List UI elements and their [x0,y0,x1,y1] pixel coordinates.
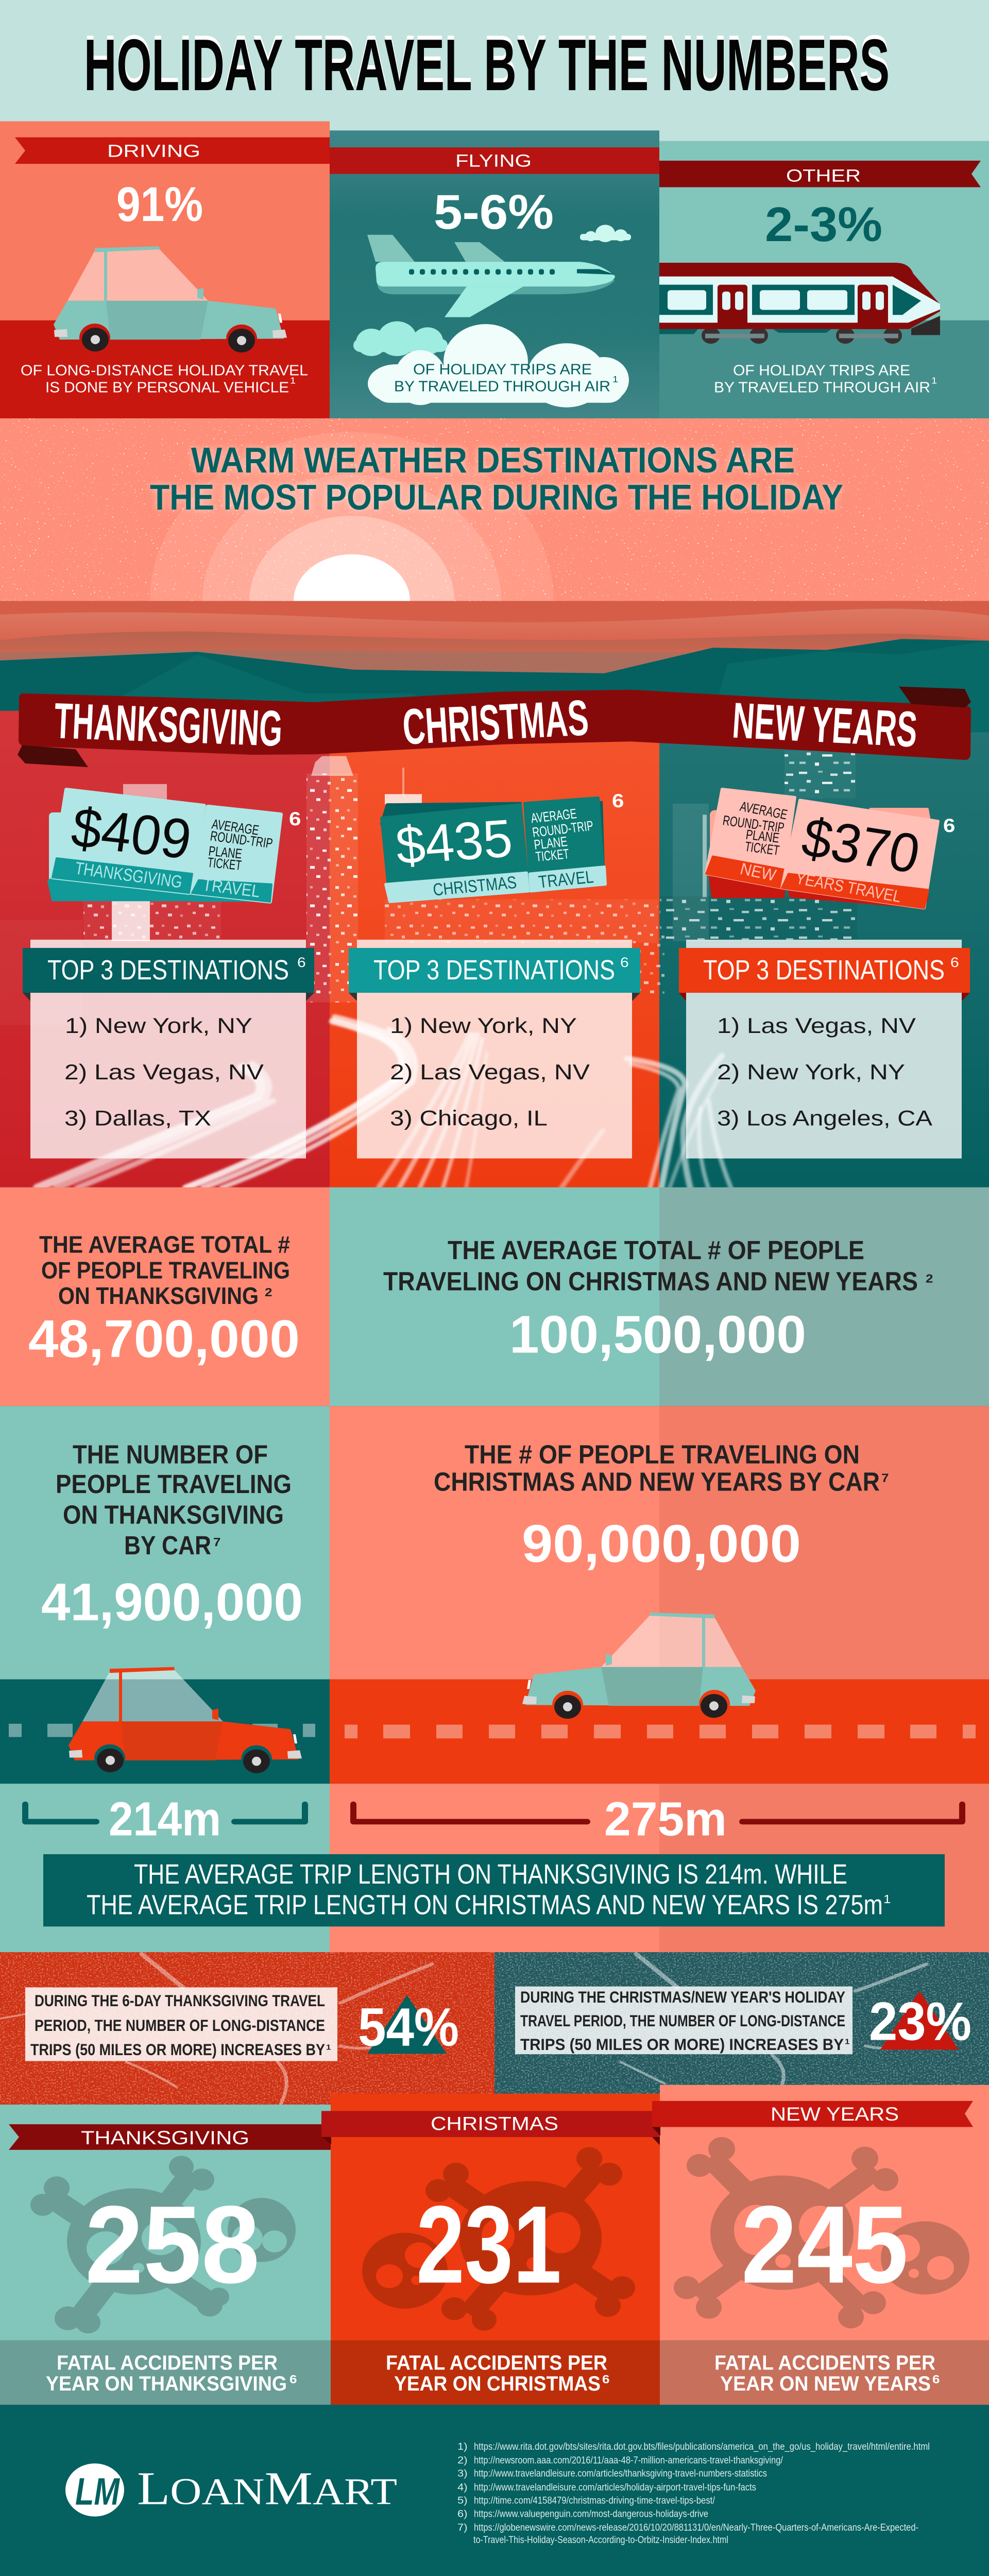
ticket: new years: $370 [797,806,925,885]
heading: warm weather [150,440,843,517]
text box: christmas increase: TRIPS (50 MILES OR MORE) INCREASES BY [520,2036,844,2054]
banner: new years [652,2101,973,2136]
stat: 91%: 91% [116,177,203,232]
footer [0,2405,989,2576]
ticket: christmas: CHRISTMAS [432,872,518,900]
panel: christmas and new years by car: CHRISTMAS AND NEW YEARS BY CAR [434,1467,880,1497]
text box: christmas increase: TRAVEL PERIOD, THE NUMBER OF LONG-DISTANCE [520,2012,845,2030]
banner: driving: DRIVING [107,141,200,161]
panel: thanksgiving fatal accidents [0,2105,331,2405]
text: fatal accidents on thanksgiving: YEAR ON THANKSGIVING [46,2372,287,2396]
text box: christmas increase [515,1987,852,2054]
banner: other: OTHER [786,166,861,185]
panel: christmas and new years by car: 7 [881,1472,889,1485]
icon: teal car [522,1613,756,1719]
text: fatal accidents on new years: 6 [932,2373,940,2386]
heading: warm weather: THE MOST POPULAR DURING THE HOLIDAY [150,477,843,517]
text: driving description: OF LONG-DISTANCE HOLIDAY TRAVEL [21,363,308,379]
banner: other [659,161,981,187]
panel: thanksgiving by car: THE NUMBER OF [73,1440,268,1469]
text: driving description: 1 [290,376,296,386]
stat: 23%: 23% [869,1991,971,2052]
panel: thanksgiving destinations: 3) Dallas, TX [64,1107,211,1130]
panel: total people on christmas and new years: THE AVERAGE TOTAL # OF PEOPLE [448,1236,864,1265]
road: left [0,1680,330,1784]
ticket: thanksgiving: AVERAGE [211,817,260,838]
callout: average trip length: 1 [883,1893,891,1906]
stat: 5-6%: 5-6% [434,185,554,240]
header background [0,0,989,146]
panel: thanksgiving destinations: 1) New York, NY [65,1014,252,1038]
references: http://time.com/4158479/christmas-driving-time-travel-tips-best/ [474,2495,715,2506]
bracket: 214m [25,1792,305,1845]
banner: flying [330,147,668,181]
references: 2) [457,2455,468,2466]
references: 3) [457,2468,468,2479]
panel: destinations background [0,711,989,1188]
ticket: new years: 6 [943,815,955,837]
references: https://www.valuepenguin.com/most-dangerous-holidays-drive [474,2508,708,2519]
ticket: new years: YEARS TRAVEL [794,869,903,906]
icon: skull [30,2156,296,2333]
text box: thanksgiving increase: 1 [326,2043,331,2052]
icon: car [54,246,287,353]
panel: trip length [0,1784,989,1953]
text: fatal accidents on thanksgiving: 6 [289,2373,297,2386]
text box: christmas increase: DURING THE CHRISTMAS/NEW YEAR'S HOLIDAY [520,1989,845,2006]
ticket: christmas: $435 [394,809,515,876]
text: other description: 1 [931,376,937,386]
icon: skull [674,2137,969,2328]
panel: thanksgiving by car [0,1406,330,1680]
ticket: christmas: 6 [612,790,624,812]
text: driving description [21,363,308,396]
text: flying description: BY TRAVELED THROUGH AIR [394,379,610,395]
references: 4) [457,2482,468,2493]
references [457,2441,930,2546]
text: fatal accidents on thanksgiving [46,2351,297,2396]
stat: 245: 245 [741,2183,908,2307]
text: fatal accidents on christmas: 6 [602,2373,609,2386]
ticket: thanksgiving: 6 [289,808,301,829]
panel: new years destinations: 3) Los Angeles, CA [717,1107,932,1130]
panel: flying [330,130,668,418]
ticket: new years: AVERAGE [738,799,789,823]
banner: flying: FLYING [455,150,532,171]
references: http://newsroom.aaa.com/2016/11/aaa-48-7-million-americans-travel-thanksgiving/ [474,2455,783,2466]
ticket: christmas: TRAVEL [537,867,594,892]
landscape [0,601,989,751]
icon: white cloud [368,324,629,408]
panel: total people on thanksgiving: 2 [265,1286,272,1299]
ticket: christmas: PLANE [533,834,568,853]
icon: skull [362,2147,635,2331]
panel: christmas and new years by car: 90,000,000 [522,1514,801,1573]
text box: thanksgiving increase: DURING THE 6-DAY THANKSGIVING TRAVEL [35,1992,325,2010]
logo: LoanMart: LOANMART [137,2463,397,2514]
text: fatal accidents on new years [714,2351,940,2396]
references: 6) [457,2508,468,2519]
ticket: thanksgiving: $409 [68,796,195,871]
panel: christmas destinations: 3) Chicago, IL [390,1107,548,1130]
text: other description [714,363,937,396]
banner: thanksgiving [9,2124,331,2150]
text: flying description: OF HOLIDAY TRIPS ARE [413,362,592,378]
banner: new years: NEW YEARS [771,2104,899,2125]
text: fatal accidents on new years: FATAL ACCIDENTS PER [714,2351,935,2375]
references: 5) [457,2495,468,2506]
panel: thanksgiving by car: ON THANKSGIVING [63,1500,284,1530]
text box: thanksgiving increase: TRIPS (50 MILES OR MORE) INCREASES BY [30,2041,325,2059]
bracket: 275m [353,1792,962,1845]
text: fatal accidents on thanksgiving: FATAL ACCIDENTS PER [57,2351,278,2375]
panel: thanksgiving by car: 41,900,000 [41,1573,303,1632]
ticket: christmas: TICKET [535,846,570,865]
panel: total people on thanksgiving: OF PEOPLE TRAVELING [41,1257,290,1284]
stat: 231: 231 [416,2183,561,2307]
panel: total people on christmas and new years: 2 [926,1273,933,1285]
ticket: christmas: ROUND-TRIP [532,818,594,840]
heading: christmas: CHRISTMAS [401,690,590,755]
ticket: new years: ROUND-TRIP [722,813,786,836]
city skyline [0,751,857,1025]
panel: new years destinations: 6 [950,955,959,971]
heading: thanksgiving: THANKSGIVING [53,693,284,757]
panel: total people on thanksgiving: ON THANKSGIVING [58,1283,259,1309]
panel: thanksgiving by car: 7 [213,1536,220,1549]
panel: total people on christmas and new years: 100,500,000 [509,1305,806,1364]
callout: average trip length [43,1854,945,1926]
text: fatal accidents on christmas: YEAR ON CHRISTMAS [394,2372,601,2396]
text: fatal accidents on christmas [386,2351,609,2396]
panel: new years destinations: 2) New York, NY [717,1060,905,1084]
stat: 54%: 54% [358,1996,459,2057]
panel: thanksgiving trip increase [0,1952,494,2105]
ticket: new years: TICKET [744,839,780,858]
ribbon [18,687,971,767]
text: flying description: 1 [612,375,618,385]
banner: driving [15,138,337,170]
text: other description: BY TRAVELED THROUGH AIR [714,380,930,396]
road: right [330,1680,989,1784]
text: driving description: IS DONE BY PERSONAL VEHICLE [45,380,289,396]
icon: plane [367,235,615,317]
panel: total people on christmas and new years [330,1188,989,1406]
references: http://www.travelandleisure.com/articles/thanksgiving-travel-numbers-statistics [474,2468,767,2479]
ticket: thanksgiving [49,790,301,902]
icon: red car [69,1667,302,1774]
panel: new years fatal accidents [652,2085,989,2405]
icon: small cloud [580,225,631,242]
panel: thanksgiving destinations: 6 [297,955,306,971]
panel: thanksgiving destinations [23,940,314,1159]
icon: teal cloud [353,321,448,356]
panel: christmas destinations: 2) Las Vegas, NV [390,1060,590,1084]
ticket: thanksgiving: PLANE [208,843,243,862]
panel: total people on thanksgiving: THE AVERAGE TOTAL # [39,1231,290,1258]
ticket: thanksgiving: ROUND-TRIP [209,828,274,852]
panel: christmas and new years by car: THE # OF PEOPLE TRAVELING ON [465,1440,860,1469]
references: http://www.travelandleisure.com/articles/holiday-airport-travel-tips-fun-facts [474,2482,756,2493]
panel: driving [0,121,337,418]
light trails [38,1017,731,1188]
panel: thanksgiving by car: PEOPLE TRAVELING [56,1470,292,1499]
ticket: new years: NEW [738,860,778,885]
stat: 2-3%: 2-3% [765,197,882,252]
text box: thanksgiving increase: PERIOD, THE NUMBER OF LONG-DISTANCE [35,2017,325,2035]
icon: sun with rings [150,432,554,770]
panel: christmas and new years trip increase [494,1952,989,2105]
panel: thanksgiving by car: BY CAR [124,1531,211,1560]
panel: thanksgiving destinations: TOP 3 DESTINATIONS [47,955,289,986]
stat: 258: 258 [85,2183,260,2307]
text: fatal accidents on christmas: FATAL ACCIDENTS PER [386,2351,607,2375]
ticket: thanksgiving: THANKSGIVING [74,858,184,892]
text: other description: OF HOLIDAY TRIPS ARE [733,363,910,379]
text box: christmas increase: 1 [845,2038,850,2046]
banner: christmas: CHRISTMAS [431,2113,558,2134]
banner: thanksgiving: THANKSGIVING [81,2127,249,2149]
panel: total people on thanksgiving [0,1188,330,1406]
references: to-Travel-This-Holiday-Season-According-to-Orbitz-Insider-Index.html [473,2534,728,2546]
panel: total people on thanksgiving: 48,700,000 [28,1310,300,1369]
panel: christmas destinations: 6 [620,955,629,971]
ticket: thanksgiving: TICKET [207,855,242,873]
icon: train [659,263,940,344]
panel: new years destinations: 1) Las Vegas, NV [717,1014,916,1038]
bracket: 275m: 275m [604,1792,727,1845]
ticket: thanksgiving: TRAVEL [201,874,262,901]
logo: LoanMart: LM [75,2470,120,2513]
panel: thanksgiving destinations: 2) Las Vegas, NV [64,1060,264,1084]
panel: christmas destinations: 1) New York, NY [390,1014,577,1038]
text: fatal accidents on new years: YEAR ON NEW YEARS [720,2372,931,2396]
panel: christmas destinations: TOP 3 DESTINATIONS [373,955,615,986]
text: flying description [394,362,618,395]
banner: christmas [321,2111,660,2146]
references: 7) [457,2522,468,2533]
panel: christmas destinations [349,940,640,1159]
ticket: christmas: AVERAGE [530,806,577,826]
heading: warm weather: WARM WEATHER DESTINATIONS ARE [191,440,795,480]
panel: sunset [0,418,989,770]
bracket: 214m: 214m [109,1792,221,1845]
ticket: new years [706,789,955,908]
ticket: christmas [382,790,624,902]
panel: other [659,141,989,418]
panel: new years destinations [679,940,970,1159]
panel: christmas fatal accidents [321,2094,660,2405]
text box: thanksgiving increase [25,1987,337,2061]
panel: christmas and new years by car [330,1406,989,1680]
references: 1) [457,2441,468,2452]
ticket: new years: PLANE [745,827,780,846]
